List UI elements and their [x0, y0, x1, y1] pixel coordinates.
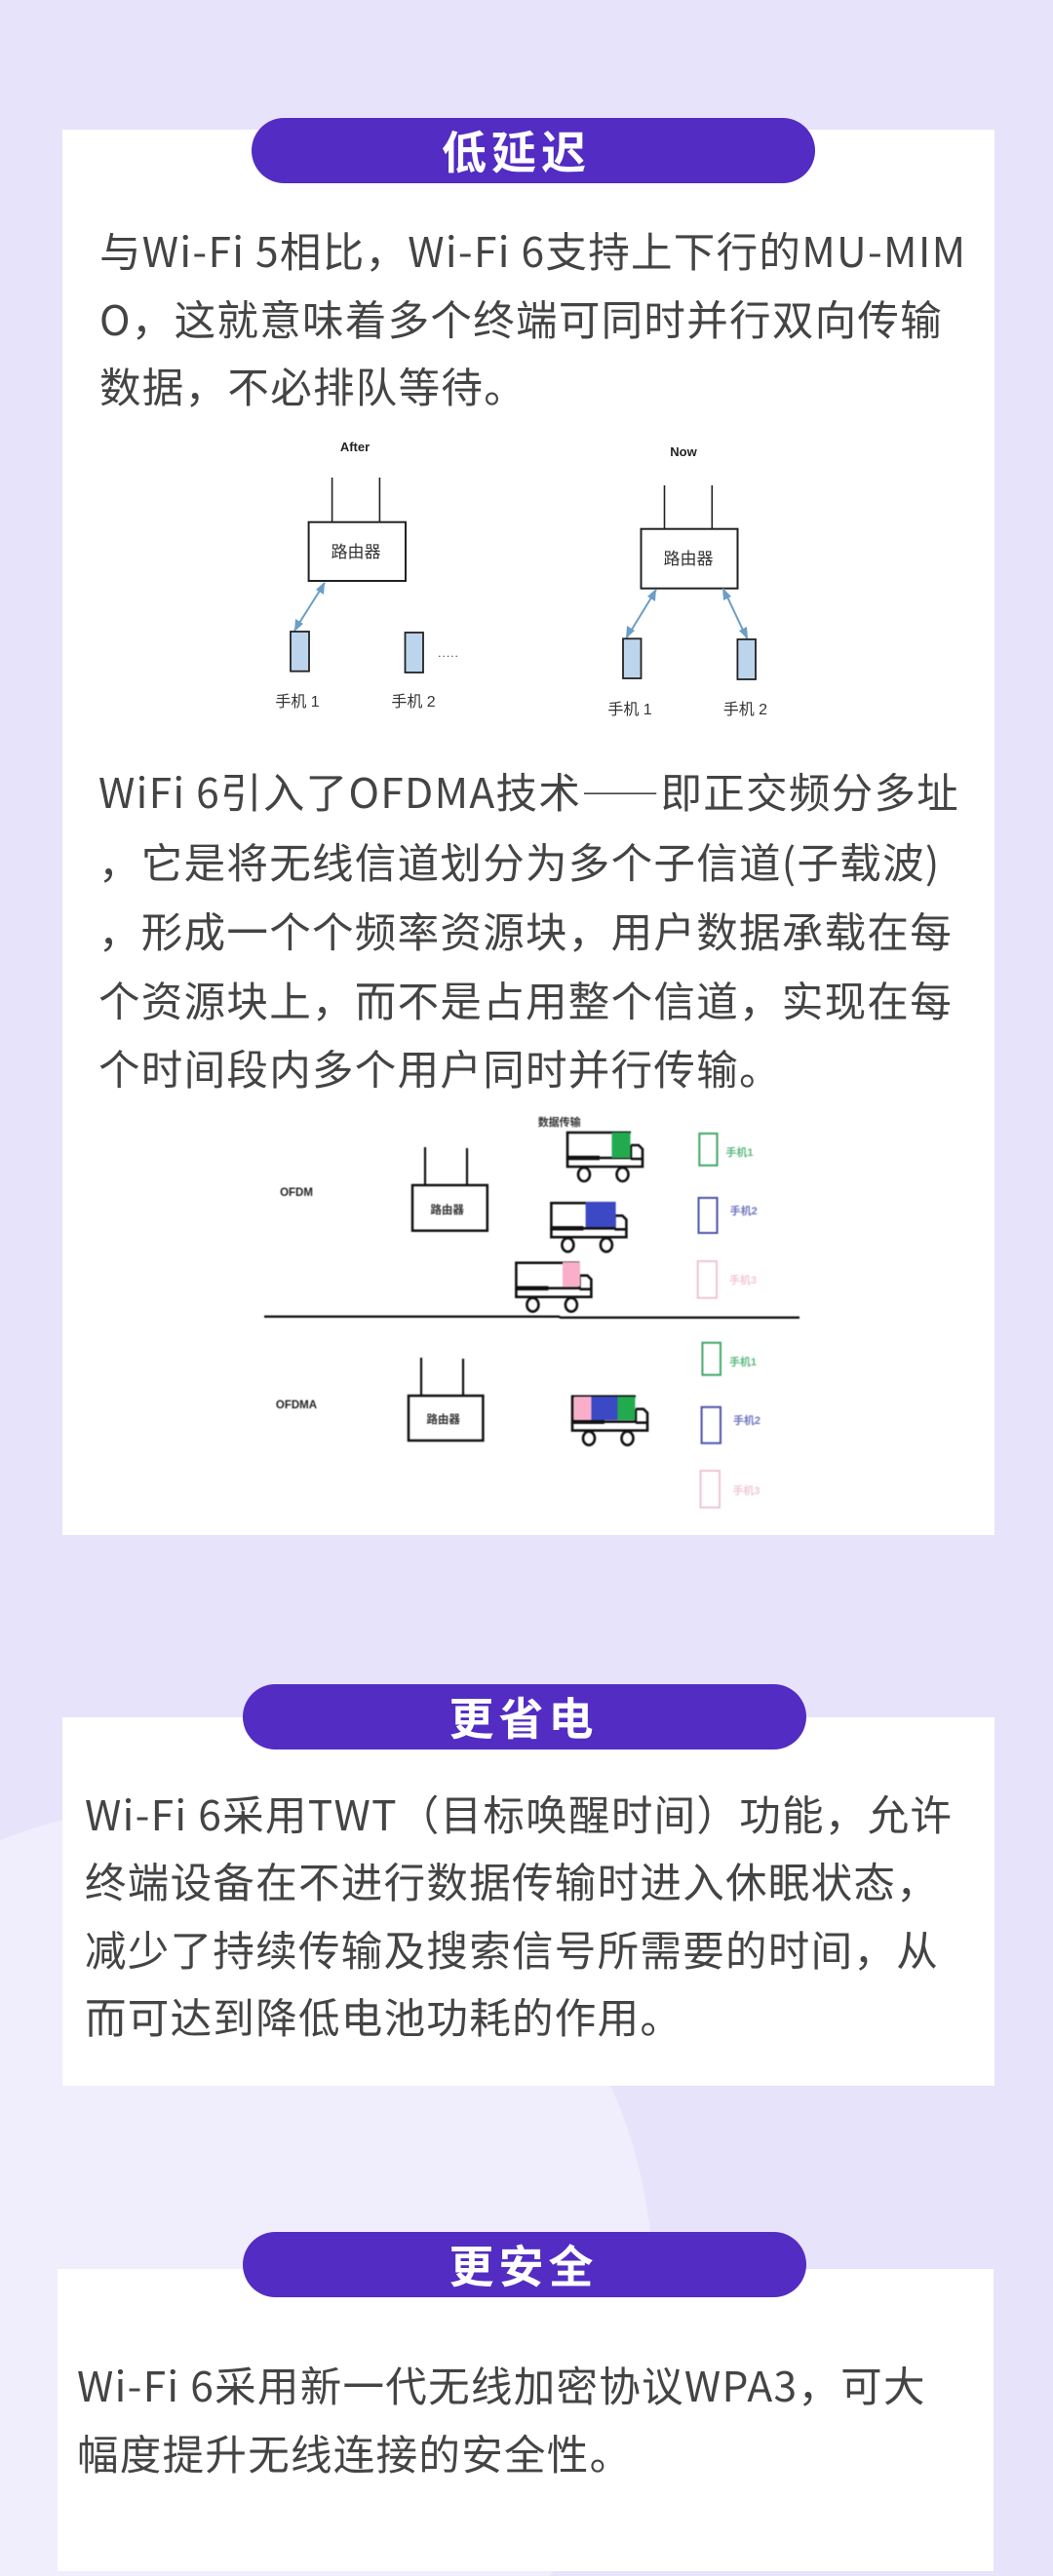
diagram: now: 手机 2 — [723, 701, 767, 718]
panel: security — [58, 2269, 994, 2571]
section: OFDM: OFDM — [280, 1187, 313, 1199]
text block: WPA3 — [77, 2355, 926, 2482]
panel: power saving — [62, 1717, 994, 2086]
heading: security — [243, 2232, 806, 2297]
text block: TWT: 而可达到降低电池功耗的作用。 — [85, 1986, 682, 2046]
section: OFDM: 手机2 — [730, 1204, 758, 1217]
text block: WPA3: 幅度提升无线连接的安全性。 — [77, 2423, 632, 2482]
heading: low latency — [252, 118, 815, 183]
text block: TWT: 减少了持续传输及搜索信号所需要的时间，从 — [85, 1919, 939, 1979]
heading: power saving — [243, 1684, 806, 1749]
diagram: after: ..... — [438, 646, 459, 660]
diagram: now: 路由器 — [663, 550, 714, 568]
chart: MU-MIMO diagram — [275, 440, 767, 718]
diagram: now: 手机 1 — [607, 701, 652, 718]
section: OFDM: 手机1 — [725, 1145, 753, 1159]
diagram: after: 手机 1 — [275, 693, 320, 711]
text block: TWT — [85, 1784, 953, 2046]
text block: OFDMA — [98, 760, 959, 1097]
diagram: after: 路由器 — [332, 543, 380, 561]
section: OFDM — [280, 1133, 758, 1312]
text block: WPA3: Wi-Fi 6采用新一代无线加密协议WPA3，可大 — [77, 2355, 926, 2414]
text block: MU-MIMO: O，这就意味着多个终端可同时并行双向传输 — [99, 288, 943, 347]
diagram: after — [275, 440, 459, 711]
panel: low latency — [62, 130, 994, 1535]
label: data transfer: 数据传输 — [538, 1115, 581, 1129]
diagram: after: 手机 2 — [391, 693, 436, 711]
heading: low latency: 低延迟 — [442, 118, 591, 182]
section: OFDMA: 手机2 — [733, 1413, 760, 1427]
text block: MU-MIMO — [99, 220, 966, 415]
text block: MU-MIMO: 数据，不必排队等待。 — [99, 355, 526, 415]
section: OFDMA: 手机1 — [729, 1355, 757, 1368]
text block: TWT: Wi-Fi 6采用TWT（目标唤醒时间）功能，允许 — [85, 1784, 953, 1843]
section: OFDMA: OFDMA — [276, 1400, 317, 1411]
diagram: after: After — [340, 440, 370, 454]
section: OFDM: 手机3 — [729, 1273, 757, 1287]
text block: OFDMA: ，它是将无线信道划分为多个子信道(子载波) — [98, 830, 941, 891]
text block: MU-MIMO: 与Wi-Fi 5相比，Wi-Fi 6支持上下行的MU-MIM — [99, 220, 966, 279]
heading: power saving: 更省电 — [448, 1684, 599, 1749]
section: OFDM: 路由器 — [430, 1203, 464, 1216]
section: OFDMA — [276, 1343, 760, 1508]
diagram: now: Now — [670, 444, 698, 459]
text block: OFDMA: WiFi 6引入了OFDMA技术——即正交频分多址 — [98, 760, 959, 821]
chart: OFDM vs OFDMA diagram — [263, 1115, 800, 1509]
text block: TWT: 终端设备在不进行数据传输时进入休眠状态， — [85, 1851, 939, 1910]
text block: OFDMA: ，形成一个个频率资源块，用户数据承载在每 — [98, 901, 953, 959]
text block: OFDMA: 个时间段内多个用户同时并行传输。 — [98, 1037, 782, 1097]
section: OFDMA: 手机3 — [732, 1483, 760, 1497]
section: OFDMA: 路由器 — [426, 1412, 460, 1426]
diagram: now — [607, 444, 767, 718]
text block: OFDMA: 个资源块上，而不是占用整个信道，实现在每 — [98, 969, 953, 1029]
heading: security: 更安全 — [448, 2232, 599, 2296]
